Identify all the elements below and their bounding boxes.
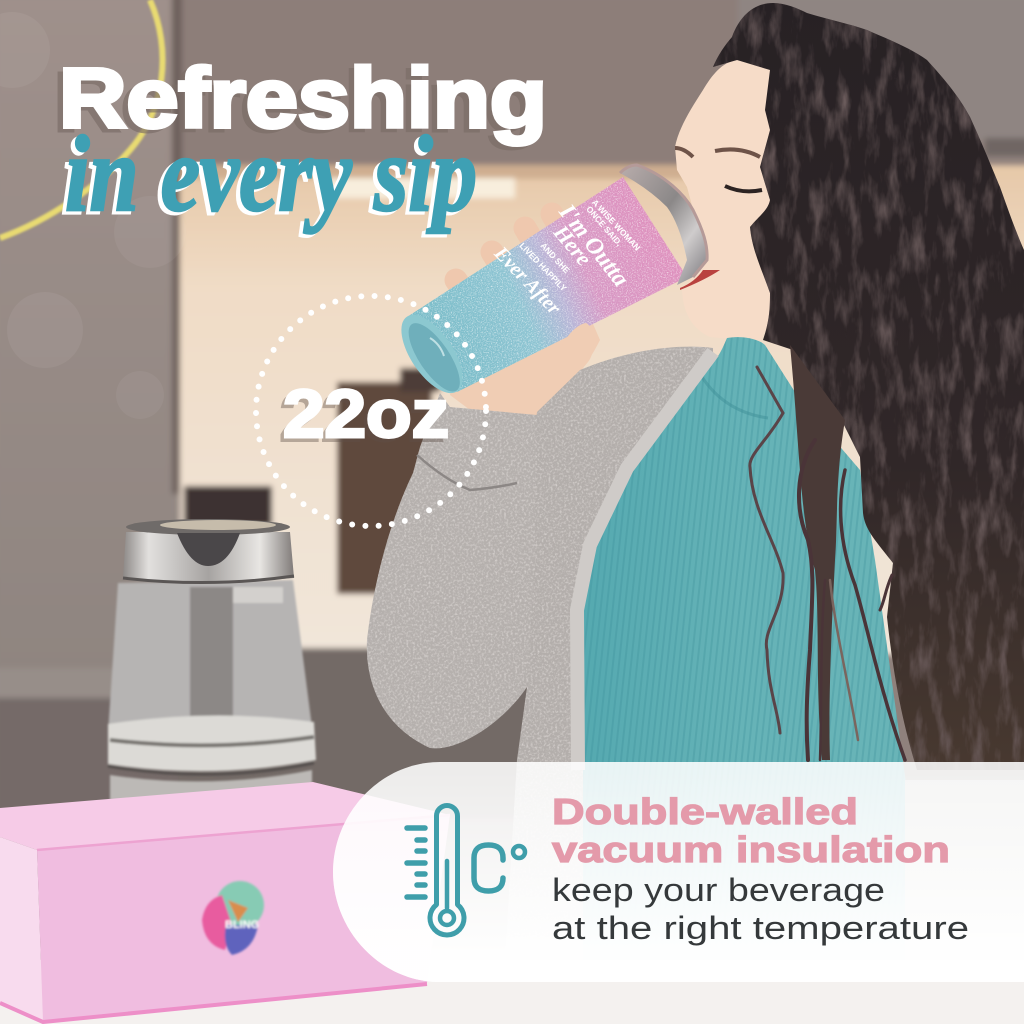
thumb (552, 323, 594, 378)
box logo: BLING (225, 919, 259, 931)
tumbler lettering: ONCE SAID, (584, 204, 624, 248)
callout panel: insulation (333, 762, 1024, 982)
subtitle script: in every sip (65, 115, 477, 234)
tumbler lettering: Here (548, 219, 597, 271)
hand behind cup (450, 214, 600, 422)
kettle (108, 519, 316, 800)
counter (0, 960, 1024, 1024)
22oz callout (256, 296, 486, 526)
tumbler lettering (489, 197, 642, 319)
title (53, 51, 547, 237)
body text: keep your beverage (552, 872, 885, 908)
hair (713, 3, 1024, 770)
tumbler (389, 165, 707, 403)
body text: at the right temperature (552, 910, 969, 946)
heading (552, 791, 950, 870)
cardigan (367, 347, 1024, 960)
22oz callout: 22oz (283, 376, 449, 452)
body text (552, 872, 969, 946)
subtitle script: in every sip (61, 118, 473, 237)
woman (450, 3, 1024, 960)
box logo (202, 881, 264, 955)
tumbler lettering: I'm Outta (553, 199, 634, 292)
heading: vacuum insulation (552, 829, 950, 870)
tumbler lettering: LIVED HAPPILY (518, 241, 569, 293)
tumbler lettering: A WISE WOMAN (590, 197, 642, 253)
heading: Double-walled (552, 791, 858, 832)
title: Refreshing (59, 51, 547, 145)
tumbler lettering: Ever After (489, 242, 565, 319)
22oz callout: 22oz (279, 380, 445, 456)
face (675, 60, 780, 342)
pink gift box (0, 782, 450, 1022)
icon: thermometer celsius (407, 806, 525, 935)
tumbler lettering: AND SHE (538, 241, 572, 276)
sleeve (367, 393, 537, 748)
sweater (582, 337, 907, 960)
title: Refreshing (53, 55, 541, 149)
yellow neon ring (0, 0, 163, 238)
